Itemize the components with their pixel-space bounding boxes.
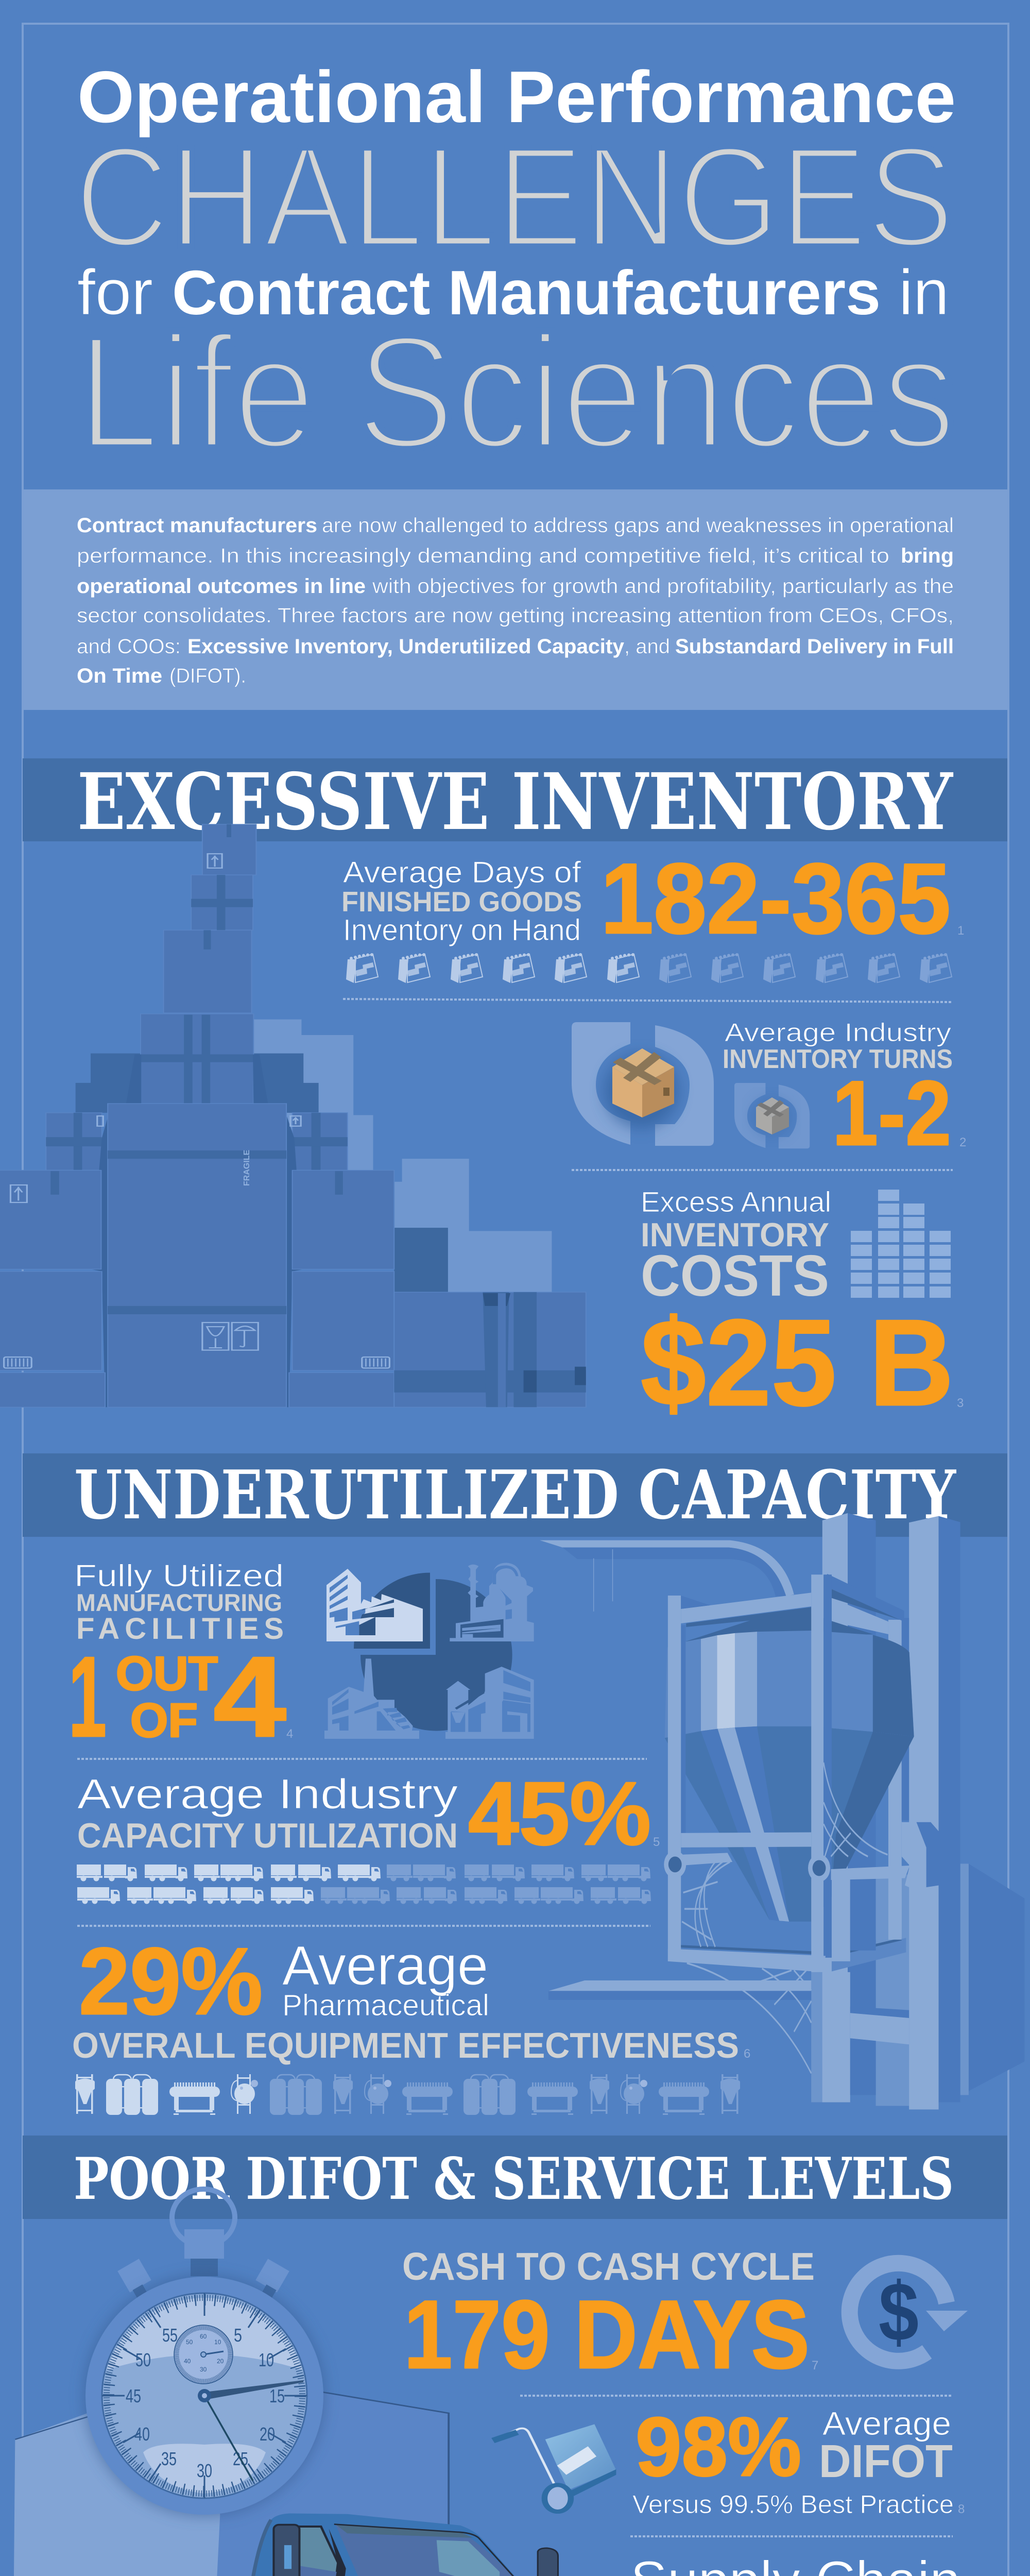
stat: fully utilized facilities: OUT bbox=[116, 1647, 218, 1700]
stat: inventory turns: Average Industry bbox=[725, 1018, 951, 1047]
intro text: Contract manufacturers bbox=[77, 514, 317, 537]
stat: excess annual inventory costs: INVENTORY bbox=[641, 1216, 829, 1253]
dial numerals: 30 bbox=[197, 2460, 212, 2481]
title line: Operational Performance: Operational Performance bbox=[77, 56, 956, 138]
intro text: performance. In this increasingly demanding and competitive field, it’s critical to bbox=[77, 545, 889, 567]
icon: dollar cycle bbox=[850, 2263, 968, 2361]
stat: average days of finished goods: 1 bbox=[957, 924, 964, 938]
stat: average difot: 98% bbox=[636, 2400, 801, 2494]
stat: inventory turns bbox=[723, 1018, 966, 1164]
stat: average difot: Average bbox=[822, 2405, 951, 2442]
stat: cash to cash cycle: CASH TO CASH CYCLE bbox=[402, 2245, 815, 2288]
dial numerals: 55 bbox=[162, 2325, 178, 2346]
stat: average days of finished goods: FINISHED GOODS bbox=[341, 886, 582, 918]
stopwatch dial bbox=[102, 2293, 307, 2498]
title line: CHALLENGES: CHALLENGES bbox=[75, 116, 954, 277]
icons: box handling marks bbox=[4, 854, 389, 1368]
title bbox=[75, 56, 956, 482]
intro text: with objectives for growth and profitability, particularly as the bbox=[372, 575, 954, 598]
stat: capacity utilization: 45% bbox=[468, 1763, 651, 1863]
stat: cash to cash cycle: 7 bbox=[812, 2359, 818, 2372]
intro text: , and bbox=[624, 635, 670, 658]
title line: for Contract Manufacturers in: in bbox=[899, 257, 949, 328]
stat: capacity utilization: 5 bbox=[653, 1835, 660, 1849]
dial numerals: 50 bbox=[135, 2349, 151, 2370]
truck cargo box and rear bbox=[13, 2368, 449, 2576]
stat: capacity utilization bbox=[77, 1763, 660, 1863]
stat: excess annual inventory costs bbox=[641, 1185, 964, 1431]
stopwatch ring and crown bbox=[117, 2189, 289, 2301]
stat: overall equipment effectiveness: Pharmaceutical bbox=[282, 1989, 489, 2022]
title line: Life Sciences: Life Sciences bbox=[77, 302, 956, 482]
stat: average days of finished goods: Inventory on Hand bbox=[343, 913, 581, 947]
stat: average days of finished goods: Average Days of bbox=[343, 856, 581, 889]
dial numerals: 25 bbox=[233, 2448, 248, 2469]
dial numerals: 5 bbox=[234, 2325, 242, 2346]
icon: small cycle arrows with grey carton bbox=[734, 1083, 810, 1148]
illustration: stopwatch bbox=[84, 2189, 324, 2516]
intro text: On Time bbox=[77, 665, 162, 687]
icon: hand truck with parcel bbox=[491, 2424, 616, 2512]
intro panel bbox=[23, 489, 1007, 710]
truck cab bbox=[237, 2513, 642, 2576]
section band: underutilized capacity bbox=[23, 1453, 1007, 1537]
title line: for Contract Manufacturers in: for bbox=[77, 257, 153, 328]
stat: fully utilized facilities bbox=[68, 1558, 293, 1761]
stat: average difot bbox=[632, 2400, 965, 2519]
stat: average days of finished goods bbox=[341, 843, 964, 955]
stat: overall equipment effectiveness: Average bbox=[282, 1934, 488, 1996]
icons: twelve calendars bbox=[346, 953, 952, 983]
icons: pharmaceutical equipment row bbox=[75, 2074, 740, 2115]
intro text: sector consolidates. Three factors are now getting increasing attention from CEOs, CFOs, bbox=[77, 604, 954, 627]
stat: fully utilized facilities: OF bbox=[130, 1693, 198, 1747]
stat: capacity utilization: CAPACITY UTILIZATION bbox=[77, 1816, 458, 1855]
stopwatch sub-dial bbox=[174, 2325, 233, 2384]
dial numerals: 45 bbox=[126, 2385, 141, 2406]
stat: average difot: Versus 99.5% Best Practice bbox=[632, 2490, 954, 2519]
title line: for Contract Manufacturers in: Contract Manufacturers bbox=[172, 258, 881, 328]
icons: truck fleet utilization bbox=[77, 1865, 651, 1904]
dial numerals bbox=[126, 2325, 285, 2481]
intro text: (DIFOT). bbox=[169, 665, 246, 687]
section band: excessive inventory bbox=[23, 756, 1007, 848]
dial numerals: 35 bbox=[161, 2448, 177, 2469]
stat: average difot: DIFOT bbox=[819, 2436, 953, 2487]
stopwatch sub-dial: 10 bbox=[214, 2338, 221, 2346]
chart: one in four facilities pie with buildings bbox=[324, 1563, 534, 1739]
stat: average difot: 8 bbox=[958, 2502, 965, 2516]
stat: fully utilized facilities: FACILITIES bbox=[76, 1612, 284, 1646]
stopwatch shadow bbox=[84, 2276, 324, 2516]
stat: overall equipment effectiveness: 29% bbox=[79, 1928, 263, 2034]
intro text bbox=[77, 514, 954, 687]
icon: money stack chart bbox=[851, 1190, 951, 1298]
dial numerals: 10 bbox=[259, 2349, 274, 2370]
stat: fully utilized facilities: 4 bbox=[213, 1633, 286, 1761]
stat: fully utilized facilities: MANUFACTURING bbox=[76, 1589, 282, 1616]
section band: poor difot bbox=[23, 2136, 1007, 2219]
dial numerals: 40 bbox=[134, 2424, 150, 2445]
stopwatch sub-dial: 30 bbox=[200, 2366, 207, 2373]
stat: excess annual inventory costs: Excess Annual bbox=[641, 1185, 831, 1218]
stat: inventory turns: INVENTORY TURNS bbox=[723, 1044, 953, 1074]
icon: dollar cycle: $ bbox=[879, 2265, 919, 2359]
label: fragile: FRAGILE bbox=[243, 1149, 251, 1186]
stat: fully utilized facilities: 1 bbox=[68, 1633, 107, 1761]
icon: large cycle arrows with carton bbox=[572, 1022, 714, 1146]
stat: average days of finished goods: 182-365 bbox=[600, 843, 951, 955]
stat: fully utilized facilities: 4 bbox=[286, 1727, 293, 1741]
illustration: delivery truck bbox=[13, 2368, 642, 2576]
stat: inventory turns: 1-2 bbox=[832, 1062, 951, 1164]
intro text: and COOs: bbox=[77, 635, 181, 658]
stopwatch sub-dial: 50 bbox=[186, 2338, 193, 2346]
stopwatch sub-dial: 20 bbox=[217, 2358, 224, 2365]
stopwatch case bbox=[85, 2277, 323, 2515]
intro text: Excessive Inventory, Underutilized Capacity bbox=[187, 635, 625, 658]
stat: overall equipment effectiveness: OVERALL EQUIPMENT EFFECTIVENESS bbox=[72, 2025, 739, 2065]
intro text: are now challenged to address gaps and weaknesses in operational bbox=[322, 514, 954, 537]
stat: fully utilized facilities: Fully Utilized bbox=[74, 1558, 284, 1593]
stat: overall equipment effectiveness bbox=[72, 1928, 750, 2065]
intro text: operational outcomes in line bbox=[77, 575, 366, 598]
stopwatch sub-dial: 60 bbox=[200, 2333, 207, 2340]
stat: capacity utilization: Average Industry bbox=[77, 1771, 458, 1818]
intro text: Substandard Delivery in Full bbox=[675, 635, 954, 658]
stat: excess annual inventory costs: COSTS bbox=[641, 1243, 829, 1308]
intro text: bring bbox=[901, 545, 954, 567]
dial numerals: 20 bbox=[260, 2424, 275, 2445]
stopwatch sub-dial: 40 bbox=[184, 2358, 191, 2365]
stat: excess annual inventory costs: 3 bbox=[957, 1396, 964, 1410]
illustration: silo and gantry bbox=[540, 1513, 1024, 2109]
stat: inventory turns: 2 bbox=[959, 1136, 966, 1149]
dial numerals: 15 bbox=[269, 2385, 285, 2406]
stat: cash to cash cycle: 179 DAYS bbox=[404, 2280, 810, 2388]
illustration: stacked boxes bbox=[0, 824, 586, 1407]
stat: overall equipment effectiveness: 6 bbox=[744, 2047, 750, 2061]
stopwatch hands bbox=[198, 2380, 303, 2481]
stat: excess annual inventory costs: $25 B bbox=[641, 1295, 954, 1431]
